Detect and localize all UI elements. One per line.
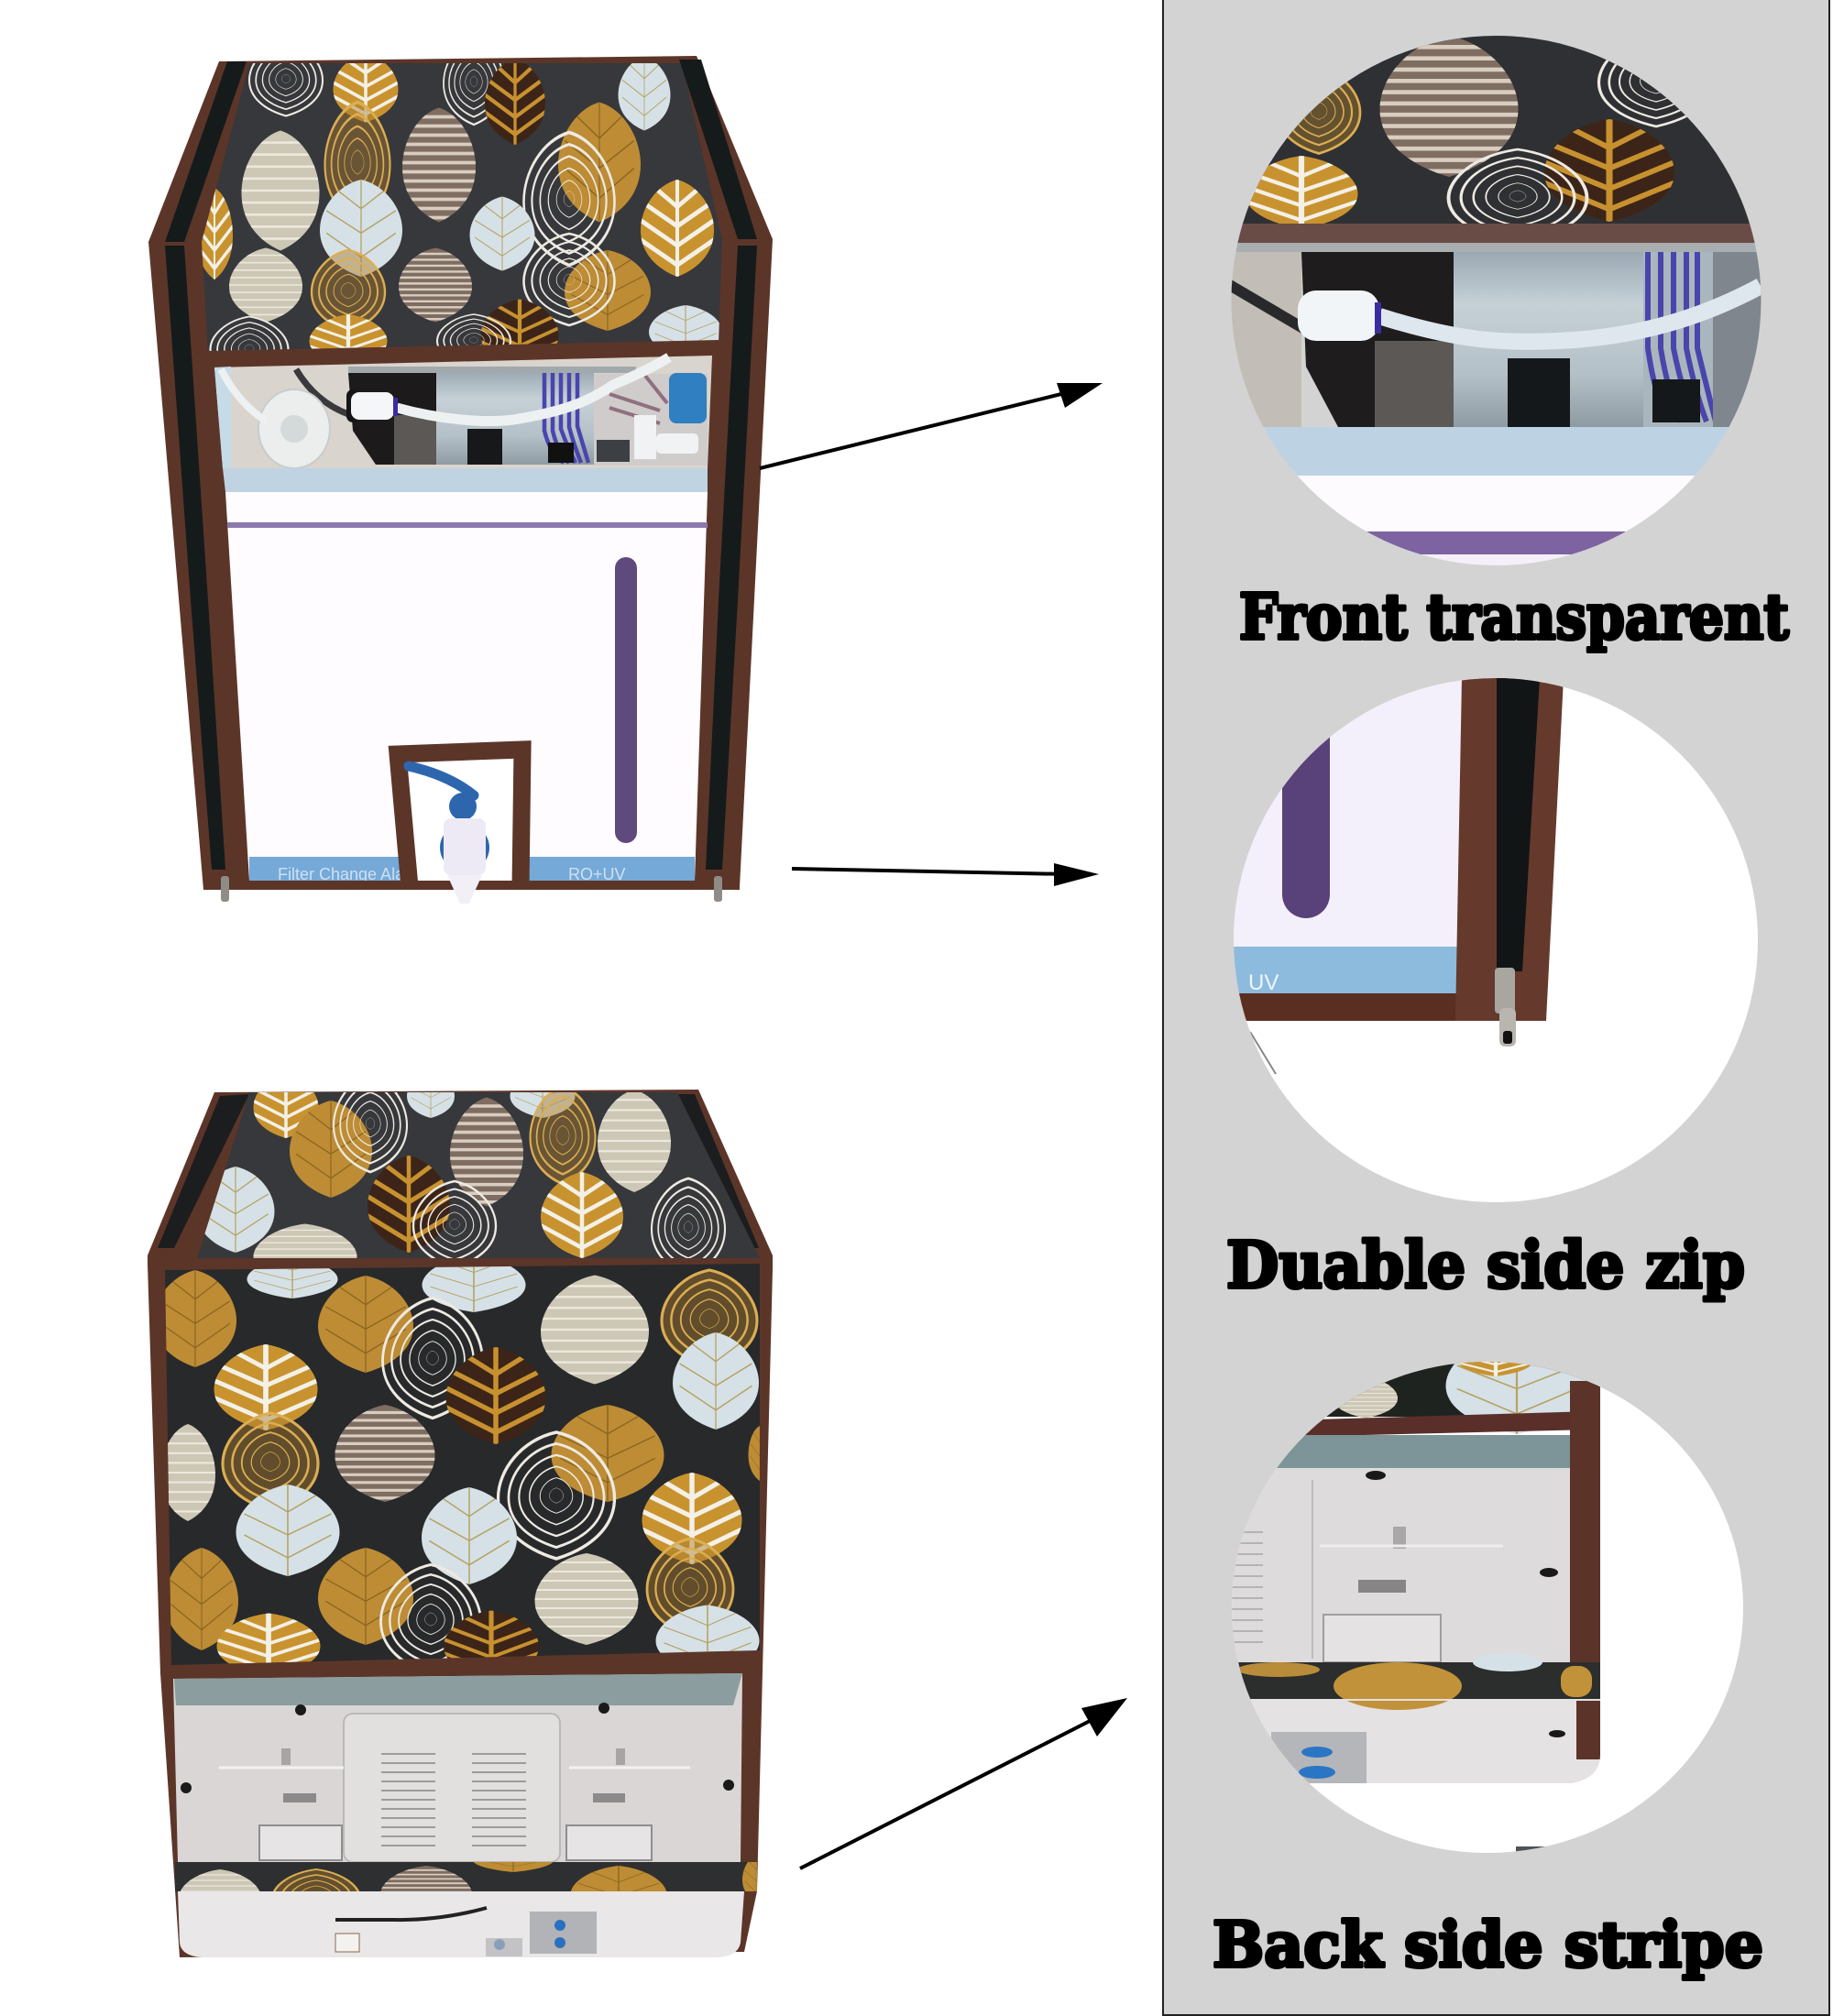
top metal bar [348,367,636,373]
stitched band [1228,224,1769,243]
caption: side zip: Duable side zip [1226,1227,1745,1303]
back face print [154,1255,772,1679]
black blocks [467,429,502,465]
tap [409,766,489,904]
blue band with label: Filter Change Alarm [278,865,423,883]
ledge [223,468,708,492]
unit back panel [173,1673,742,1862]
bolt and mounts [1393,1527,1406,1549]
membrane cylinder [436,371,594,465]
solenoid [669,373,707,423]
panel: feature sidebar [1163,0,1829,2015]
roof print [197,1092,760,1258]
blue band with label: RO+UV [568,865,626,883]
roof zips [158,1094,759,1248]
service door with vents [344,1714,560,1862]
back stripe [175,1862,757,1891]
ledge and tank top [1263,427,1729,476]
screw holes [1366,1471,1386,1480]
white pipe [397,357,669,421]
arrow to front transparent [760,383,1103,468]
right side circuitry [594,371,708,466]
level gauge [615,557,637,843]
arrow to side zip [792,863,1099,886]
zip pulls [221,876,229,902]
detail circle: front transparent window [1228,32,1769,568]
rotary valve [258,389,330,468]
lower back panel with connectors [178,1891,744,1957]
front view: purifier cover [148,38,773,904]
white fittings [634,415,698,459]
transparent window [214,356,712,468]
detail circle: side zip: UV [1248,970,1279,995]
caption: back side stripe: Back side stripe [1213,1909,1763,1982]
arrow to back side stripe [800,1698,1127,1868]
cover outer binding [148,1090,773,1957]
blue wires [544,373,588,463]
back view: purifier cover [148,1072,773,1957]
tap opening frame [398,750,522,887]
front print panel [202,63,722,356]
zippers [165,60,757,870]
mounts and labels [219,1748,690,1860]
blue band with label [249,857,695,883]
white tank panel [225,492,708,881]
black hose [296,369,351,415]
motor [348,373,436,465]
divider band [208,340,719,363]
detail circle: side zip [1228,678,1758,1202]
stripe [1232,1662,1600,1699]
lower panel [1232,1699,1600,1783]
cover outer binding [148,56,773,890]
window interior [1228,252,1301,427]
screw holes [181,1703,734,1793]
detail circle: back side stripe [1232,1333,1743,1855]
